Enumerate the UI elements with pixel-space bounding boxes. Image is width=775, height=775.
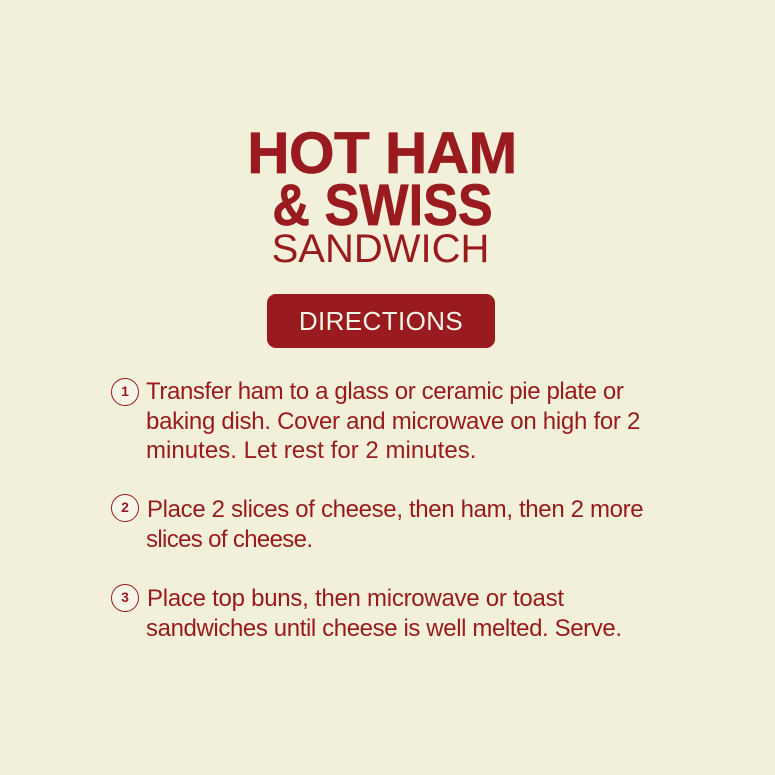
step number 2: 2 [121,499,129,515]
step number 1 [111,378,139,406]
directions badge: DIRECTIONS [299,306,463,336]
step number 2 [111,494,139,522]
step 1 text: minutes. Let rest for 2 minutes. [146,437,476,464]
step 3 text: Place top buns, then microwave or toast [147,585,564,612]
step 2 [111,494,643,552]
step 2 text: slices of cheese. [146,526,312,552]
step 3 text: sandwiches until cheese is well melted. Serve. [146,614,622,642]
step 3 [111,584,622,642]
step number 1: 1 [121,383,129,399]
step 1 text: baking dish. Cover and microwave on high for 2 [146,408,640,434]
title: & SWISS [272,173,492,238]
step number 3 [111,584,139,612]
title: SANDWICH [272,227,489,271]
step 1 text: Transfer ham to a glass or ceramic pie plate or [146,378,623,405]
step 2 text: Place 2 slices of cheese, then ham, then 2 more [147,496,643,523]
step 1 [111,378,640,464]
step 3 text [146,585,622,642]
step number 3: 3 [121,589,129,605]
step 1 text [146,378,640,464]
step 2 text [146,496,643,552]
directions badge [267,294,495,348]
title [247,121,517,271]
title: HOT HAM [247,121,517,186]
